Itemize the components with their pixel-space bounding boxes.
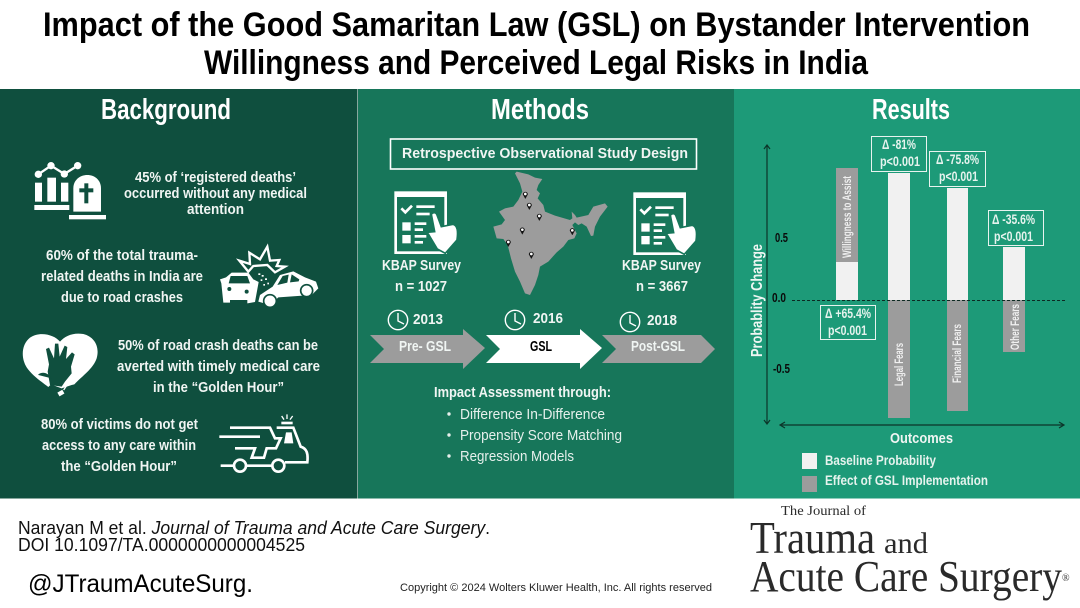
text: golden hour timely care: 50% of road crash deaths can be (118, 338, 318, 354)
impact assessment list: Impact Assessment through: (434, 385, 611, 401)
bar: financial fears: Financial Fears (952, 324, 964, 383)
y tick -0.5: -0.5 (773, 362, 790, 376)
x axis arrow (780, 422, 1064, 428)
bar: legal fears: Legal Fears (894, 343, 906, 386)
callout: legal fears (872, 136, 926, 172)
arrow: GSL (486, 329, 602, 369)
legend: Baseline Probability (825, 453, 936, 468)
bar: legal fears (888, 173, 910, 418)
bar: willingness to assist: Willingness to Assist (842, 176, 854, 258)
icon: ambulance (219, 414, 308, 472)
callout: other fears (988, 210, 1044, 246)
citation: Narayan M et al. Journal of Trauma and Acute Care Surgery. (18, 518, 490, 538)
icon: hand in heart (23, 334, 98, 396)
arrow: pre-GSL: Pre- GSL (399, 339, 451, 355)
text: victims without care: 80% of victims do not get (41, 417, 198, 433)
year 2018 (620, 312, 677, 332)
text: trauma deaths: 60% of the total trauma- (46, 248, 198, 264)
heading: results: Results (872, 94, 950, 126)
year 2013 (388, 310, 443, 330)
callout: willingness (820, 306, 876, 340)
study design box: Retrospective Observational Study Design (402, 146, 688, 162)
y axis title: Probablity Change (749, 244, 766, 357)
journal logo (750, 503, 1070, 601)
callout: other fears: p<0.001 (994, 229, 1033, 244)
icon: survey right (634, 193, 697, 254)
impact assessment list: Difference In-Difference (460, 406, 605, 423)
year 2016 (505, 310, 563, 330)
text: victims without care: access to any care within (42, 438, 196, 454)
arrow: pre-GSL (370, 329, 485, 369)
text: golden hour timely care: averted with timely medical care (117, 359, 320, 375)
survey label right: n = 3667 (636, 279, 688, 295)
callout: legal fears: Δ -81% (882, 137, 916, 152)
text: victims without care (41, 417, 198, 475)
survey label left: n = 1027 (395, 279, 447, 295)
impact assessment list: Propensity Score Matching (460, 427, 622, 444)
panel: methods (358, 89, 734, 498)
survey label left (382, 258, 461, 295)
y axis arrow (764, 145, 770, 424)
callout: financial fears: Δ -75.8% (936, 152, 979, 167)
text: registered deaths: occurred without any medical (124, 186, 307, 202)
copyright: Copyright © 2024 Wolters Kluwer Health, Inc. All rights reserved (400, 582, 712, 594)
survey label right: KBAP Survey (622, 258, 701, 274)
legend (802, 453, 988, 492)
impact assessment list: Regression Models (460, 448, 574, 465)
bar: financial fears (947, 188, 968, 411)
callout: financial fears (930, 152, 986, 186)
social handle: @JTraumAcuteSurg. (28, 570, 253, 598)
legend: Effect of GSL Implementation (825, 473, 988, 488)
callout: legal fears: p<0.001 (880, 154, 920, 169)
study design box (390, 139, 696, 169)
icon: survey left (395, 192, 458, 253)
callout: willingness: p<0.001 (828, 323, 867, 338)
journal logo: ® (1062, 573, 1070, 584)
heading: methods: Methods (491, 94, 589, 126)
impact assessment list (434, 385, 622, 465)
year 2013: 2013 (413, 312, 443, 328)
journal logo: and (884, 527, 928, 560)
text: victims without care: the “Golden Hour” (61, 459, 177, 475)
text: golden hour timely care (117, 338, 320, 396)
bar: other fears (1003, 247, 1025, 352)
year 2018: 2018 (647, 313, 677, 329)
panel: results (734, 89, 1080, 498)
text: golden hour timely care: in the “Golden Hour” (153, 380, 284, 396)
text: trauma deaths (41, 248, 203, 306)
citation (18, 518, 490, 555)
text: registered deaths: 45% of ‘registered deaths’ (135, 170, 296, 186)
x axis title: Outcomes (890, 431, 953, 447)
text: trauma deaths: due to road crashes (61, 290, 183, 306)
panel: background (0, 89, 358, 498)
arrow: post-GSL: Post-GSL (631, 339, 685, 355)
citation: DOI 10.1097/TA.0000000000004525 (18, 535, 305, 555)
y tick 0.0: 0.0 (772, 291, 786, 305)
callout: other fears: Δ -35.6% (992, 212, 1035, 227)
journal logo: Trauma (750, 513, 875, 563)
text: registered deaths (124, 170, 307, 218)
map of India with pins (493, 172, 608, 295)
year 2016: 2016 (533, 311, 563, 327)
bar: other fears: Other Fears (1010, 304, 1022, 350)
journal logo: The Journal of (781, 503, 867, 518)
callout: willingness: Δ +65.4% (825, 306, 871, 321)
bar: willingness to assist (836, 168, 858, 300)
heading: background: Background (101, 94, 231, 126)
callout: financial fears: p<0.001 (939, 169, 978, 184)
bar chart (749, 136, 1065, 428)
y tick 0.5: 0.5 (775, 231, 788, 245)
arrow: post-GSL (602, 335, 715, 363)
survey label right (622, 258, 701, 295)
text: trauma deaths: related deaths in India are (41, 269, 203, 285)
icon: car crash (220, 247, 318, 307)
arrow: GSL: GSL (530, 339, 552, 355)
zero line (792, 300, 1065, 302)
title (43, 6, 1030, 82)
text: registered deaths: attention (187, 202, 244, 218)
icon: chart and gravestone (34, 162, 106, 219)
title: Willingness and Perceived Legal Risks in India (204, 44, 869, 82)
survey label left: KBAP Survey (382, 258, 461, 274)
